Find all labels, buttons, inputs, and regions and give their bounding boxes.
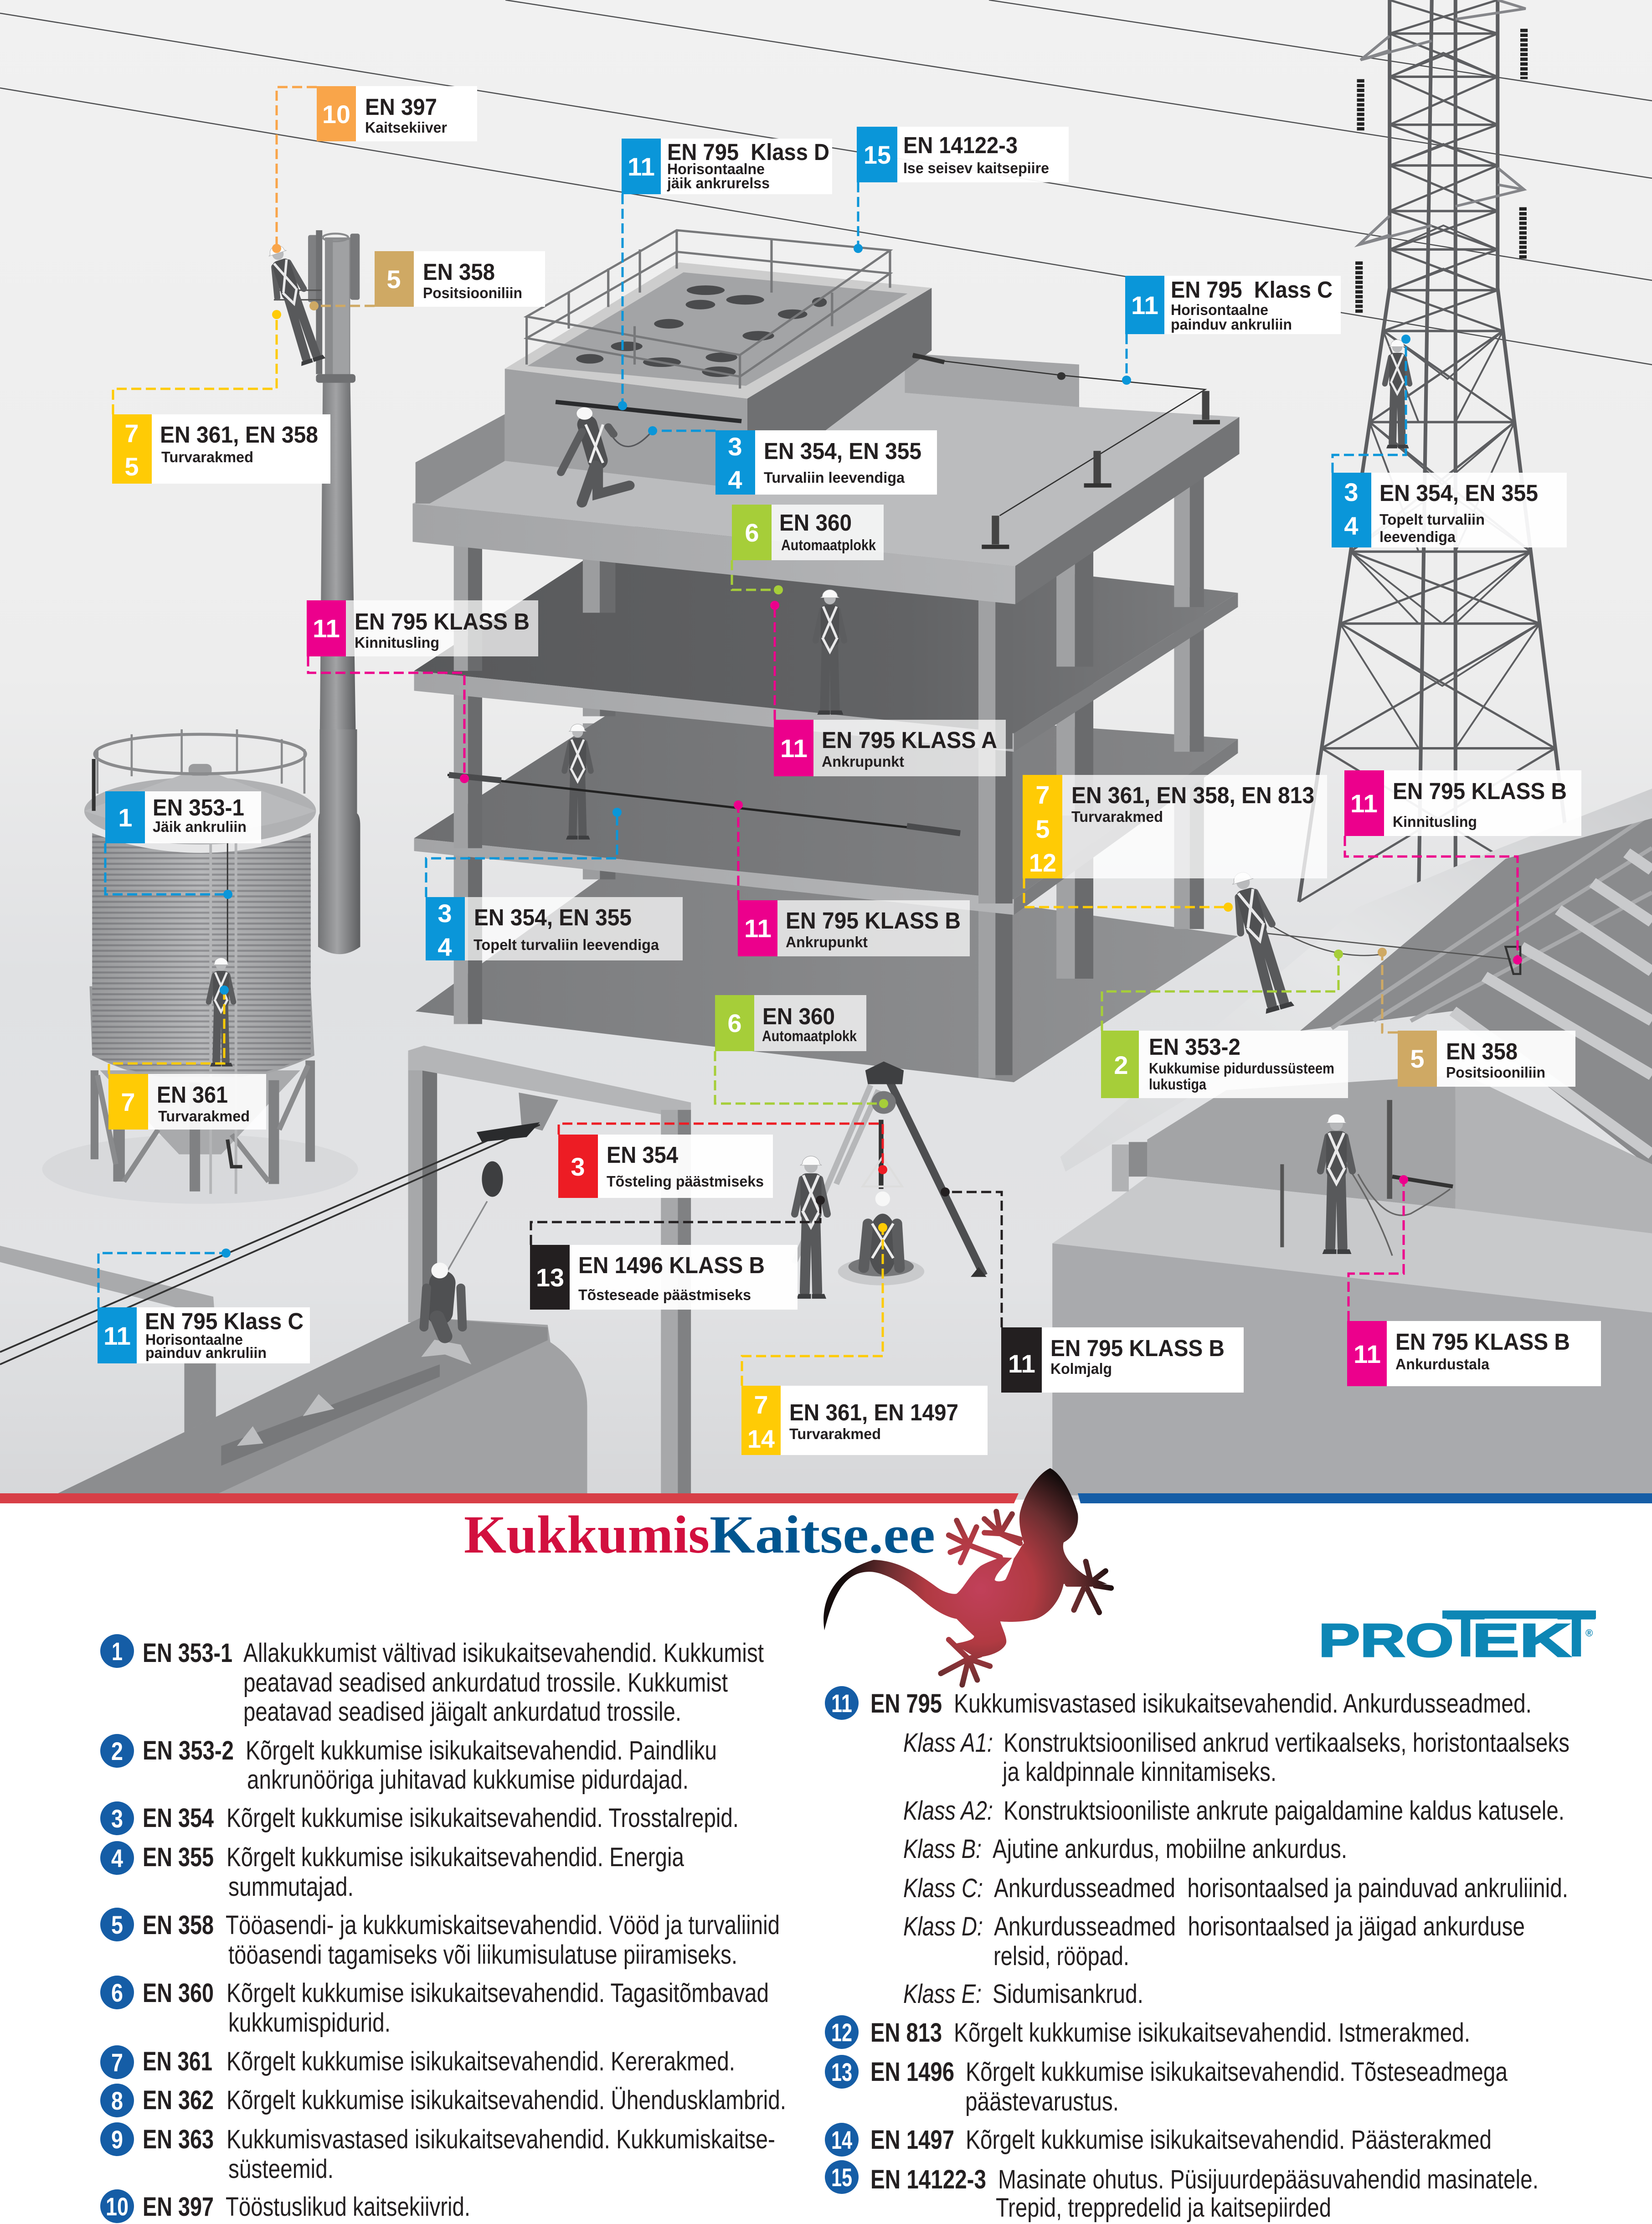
- callout: EN 1496: [530, 1245, 798, 1310]
- legend row 5: 5: [111, 1910, 123, 1939]
- logo: PROTEKT: EK: [1472, 1614, 1571, 1667]
- legend row 3: Kõrgelt kukkumise isikukaitsevahendid. Trosstalrepid.: [226, 1803, 739, 1833]
- legend: Klass C: Klass C:: [903, 1873, 983, 1903]
- legend: Klass D: Klass D:: [903, 1912, 983, 1941]
- callout: EN 361 EN 1497: 14: [747, 1424, 775, 1453]
- legend row 10: Tööstuslikud kaitsekiivrid.: [226, 2192, 470, 2222]
- illustration: climber on pole: [262, 242, 326, 366]
- callout: EN 14122-3: EN 14122-3: [903, 132, 1018, 158]
- legend: Klass D: relsid, rööpad.: [993, 1941, 1129, 1971]
- leader: roof EN 354: [648, 426, 715, 435]
- leader: building EN 354: [426, 808, 622, 897]
- callout: EN 354 EN 355 roof: Turvaliin leevendiga: [764, 469, 905, 486]
- legend row 11: EN 795: [870, 1689, 942, 1718]
- leader: EN 14122-3: [854, 182, 863, 253]
- callout: EN 361 EN 358 EN 813: Turvarakmed: [1071, 808, 1163, 825]
- callout: EN 360 roof: EN 360: [779, 510, 852, 536]
- leader: EN 1496: [531, 1196, 825, 1245]
- legend: Klass E: [903, 1979, 1143, 2009]
- callout: EN 361 EN 358 EN 813: 7: [1035, 780, 1050, 809]
- legend row 14: 14: [831, 2126, 852, 2154]
- callout: EN 795 Klass D: [622, 139, 832, 194]
- illustration: silo: [42, 729, 358, 1204]
- callout: EN 361 EN 358 EN 813: EN 361, EN 358, EN 813: [1071, 782, 1314, 808]
- callout: EN 353-1: EN 353-1: [153, 795, 244, 820]
- legend row 1: 1: [112, 1637, 123, 1666]
- callout: EN 795 Klass C roof: painduv ankruliin: [1171, 316, 1292, 333]
- legend row 9: Kukkumisvastased isikukaitsevahendid. Kukkumiskaitse-: [226, 2125, 775, 2154]
- callout: EN 14122-3: Ise seisev kaitsepiire: [903, 160, 1049, 176]
- legend row 15: EN 14122-3: [870, 2165, 986, 2194]
- legend row 1: peatavad seadised jäigalt ankurdatud trossile.: [243, 1697, 681, 1727]
- legend row 1: [100, 1634, 764, 1727]
- callout: EN 354 EN 355 building: Topelt turvaliin leevendiga: [473, 936, 659, 953]
- legend: Klass D: Ankurdusseadmed horisontaalsed ja jäigad ankurduse: [994, 1912, 1525, 1941]
- legend row 9: 9: [111, 2125, 123, 2154]
- callout: EN 1496: Tõsteseade päästmiseks: [578, 1286, 751, 1303]
- logo: KukkumisKaitse.ee: Kaitse.ee: [710, 1505, 935, 1564]
- callout: EN 354 tõsteling: EN 354: [607, 1142, 679, 1168]
- callout: EN 354 EN 355 roof: EN 354, EN 355: [764, 438, 921, 464]
- legend: Klass A2: Klass A2:: [903, 1796, 993, 1826]
- callout: EN 354 EN 355 building: [426, 897, 683, 961]
- legend row 12: [825, 2015, 1470, 2049]
- leader: tower EN 354: [1333, 335, 1410, 473]
- callout: EN 353-2: EN 353-2: [1149, 1034, 1240, 1060]
- legend row 12: 12: [831, 2018, 852, 2047]
- illustration: rescue tripod and manhole: [794, 1062, 987, 1285]
- legend row 8: Kõrgelt kukkumise isikukaitsevahendid. Ühendusklambrid.: [226, 2085, 786, 2115]
- callout: EN 358 pole: 5: [386, 265, 401, 294]
- callout: EN 795 Klass A: EN 795 KLASS A: [822, 727, 997, 753]
- callout: EN 360 roof: [732, 505, 884, 560]
- legend row 3: EN 354: [143, 1803, 214, 1833]
- callout: EN 354 EN 355 roof: 3: [728, 432, 742, 461]
- legend row 8: EN 362: [143, 2085, 214, 2115]
- callout: EN 361 EN 358 EN 813: [1023, 775, 1327, 878]
- leader: EN 360 tripod: [715, 1051, 888, 1108]
- callout: EN 795 Klass A: 11: [780, 734, 808, 763]
- legend row 11: Kukkumisvastased isikukaitsevahendid. Ankurdusseadmed.: [954, 1689, 1532, 1718]
- leader: ankurdustala: [1348, 1175, 1408, 1321]
- power lines: [0, 0, 1652, 365]
- legend row 13: EN 1496: [870, 2057, 954, 2087]
- callout: EN 354 EN 355 building: EN 354, EN 355: [474, 904, 632, 930]
- callout: EN 795 Klass B kinnitusling right: 11: [1350, 789, 1378, 818]
- leader: EN 353-1: [105, 843, 232, 899]
- callout: EN 795 Klass B ankurdustala: EN 795 KLASS B: [1395, 1329, 1570, 1355]
- callout: EN 361 EN 1497: Turvarakmed: [789, 1425, 881, 1442]
- callout: EN 354 EN 355 tower: 4: [1344, 511, 1359, 540]
- leader: klass A: [770, 601, 779, 720]
- leader: klass C roof: [1122, 334, 1131, 385]
- callout: EN 795 Klass B ankurdustala: 11: [1354, 1340, 1381, 1368]
- legend row 4: 4: [111, 1844, 123, 1873]
- legend row 5: tööasendi tagamiseks või liikumisulatuse piiramiseks.: [228, 1940, 737, 1970]
- legend row 3: 3: [111, 1804, 123, 1833]
- legend: Klass A1: ja kaldpinnale kinnitamiseks.: [1002, 1757, 1276, 1787]
- legend row 13: [825, 2055, 1508, 2116]
- legend row 1: peatavad seadised ankurdatud trossile. Kukkumist: [243, 1668, 728, 1698]
- callout: EN 353-2: Kukkumise pidurdussüsteem: [1149, 1060, 1334, 1077]
- callout: EN 795 Klass B kinnitusling left: EN 795 KLASS B: [355, 609, 530, 635]
- callout: EN 795 Klass B ankurdustala: [1347, 1321, 1601, 1386]
- legend: Klass A1: [903, 1728, 1570, 1787]
- callout: EN 397: [317, 86, 477, 141]
- illustration: horizontal anchor line in building: [448, 775, 960, 833]
- callout: EN 353-1: Jäik ankruliin: [153, 818, 247, 835]
- callout: EN 354 EN 355 tower: EN 354, EN 355: [1379, 480, 1538, 506]
- callout: EN 358 pole: [375, 251, 545, 307]
- callout: EN 354 EN 355 tower: 3: [1344, 478, 1359, 506]
- legend row 13: Kõrgelt kukkumise isikukaitsevahendid. Tõsteseadmega: [966, 2057, 1508, 2087]
- callout: EN 361 EN 358 EN 813: 12: [1029, 848, 1056, 877]
- illustration: worker on tower: [1385, 340, 1410, 449]
- callout: EN 795 Klass B kinnitusling right: EN 795 KLASS B: [1393, 778, 1567, 804]
- callout: EN 353-2: [1101, 1031, 1348, 1098]
- callout: EN 795 Klass B kolmjalg: 11: [1008, 1349, 1035, 1378]
- callout: EN 354 EN 355 tower: Topelt turvaliin: [1379, 511, 1485, 528]
- callout: EN 358 pole: Positsiooniliin: [423, 284, 522, 301]
- callout: EN 353-2: lukustiga: [1149, 1076, 1207, 1093]
- callout: EN 795 Klass C roof: Horisontaalne: [1171, 301, 1268, 318]
- callout: EN 795 Klass C cable: [98, 1307, 310, 1363]
- legend row 6: EN 360: [143, 1978, 214, 2008]
- callout: EN 360 tripod: Automaatplokk: [762, 1027, 857, 1044]
- callout: EN 361 silo: EN 361: [157, 1082, 228, 1108]
- logo: PROTEKT: T: [1446, 1598, 1485, 1670]
- legend row 15: [825, 2160, 1539, 2223]
- callout: EN 795 Klass C cable: Horisontaalne: [145, 1331, 243, 1348]
- callout: EN 358 roof: 5: [1410, 1044, 1425, 1073]
- illustration: kneeling worker on terrace: [561, 407, 629, 503]
- callout: EN 795 Klass B kinnitusling right: [1344, 770, 1581, 836]
- leader: EN 361 EN 358 pole: [113, 310, 281, 414]
- callout: EN 397: EN 397: [365, 94, 437, 120]
- legend row 9: EN 363: [143, 2125, 214, 2154]
- callout: EN 795 Klass B kinnitusling left: Kinnitusling: [355, 634, 439, 651]
- callout: EN 361 silo: Turvarakmed: [158, 1108, 250, 1125]
- callout: EN 360 tripod: [715, 995, 866, 1051]
- callout: EN 14122-3: [857, 127, 1069, 182]
- legend row 10: [100, 2189, 470, 2223]
- legend row 13: päästevarustus.: [965, 2087, 1119, 2116]
- callout: EN 354 EN 355 tower: leevendiga: [1379, 528, 1456, 545]
- leader: EN 361 silo: [109, 986, 229, 1074]
- callout: EN 795 Klass C roof: EN 795 Klass C: [1171, 277, 1333, 303]
- callout: EN 795 Klass C roof: [1125, 276, 1341, 334]
- callout: EN 354 EN 355 roof: 4: [728, 465, 742, 494]
- legend row 5: [100, 1908, 780, 1970]
- illustration: multi-storey building: [412, 263, 1240, 1082]
- callout: EN 795 Klass D: EN 795 Klass D: [667, 139, 829, 165]
- callout: EN 353-1: 1: [118, 803, 133, 832]
- leader: EN 358 pole: [309, 301, 375, 310]
- leader: EN 354 red: [559, 1124, 887, 1174]
- callout: EN 361 EN 358: 7: [124, 419, 139, 448]
- leader: roof EN 360: [732, 560, 783, 594]
- callout: EN 795 Klass C cable: painduv ankruliin: [145, 1344, 267, 1361]
- legend row 14: Kõrgelt kukkumise isikukaitsevahendid. Päästerakmed: [966, 2125, 1492, 2155]
- callout: EN 795 Klass B kolmjalg: EN 795 KLASS B: [1050, 1335, 1225, 1361]
- leader: EN 397: [272, 87, 317, 253]
- logo: PROTEKT: [1318, 1598, 1596, 1670]
- callout: EN 361 EN 358: EN 361, EN 358: [160, 422, 318, 448]
- callout: EN 1496: 13: [536, 1263, 564, 1292]
- illustration: worker on silo ladder: [209, 958, 233, 1067]
- legend: Klass B: Ajutine ankurdus, mobiilne ankurdus.: [993, 1834, 1347, 1864]
- callout: EN 795 Klass A: Ankrupunkt: [822, 753, 904, 770]
- callout: EN 1496: EN 1496 KLASS B: [578, 1252, 765, 1278]
- legend row 13: 13: [831, 2058, 852, 2086]
- legend row 12: Kõrgelt kukkumise isikukaitsevahendid. Istmerakmed.: [954, 2018, 1470, 2048]
- callout: EN 358 roof: EN 358: [1446, 1038, 1518, 1064]
- callout: EN 361 silo: [108, 1074, 266, 1130]
- panel: legend background: [0, 1503, 1652, 2224]
- legend row 6: 6: [111, 1978, 123, 2007]
- legend row 15: Masinate ohutus. Püsijuurdepääsuvahendid masinatele.: [998, 2165, 1539, 2194]
- legend row 4: EN 355: [143, 1842, 214, 1872]
- callout: EN 361 EN 358: 5: [124, 452, 139, 481]
- legend: Klass A1: Klass A1:: [903, 1728, 993, 1758]
- legend row 6: Kõrgelt kukkumise isikukaitsevahendid. Tagasitõmbavad: [226, 1978, 769, 2008]
- legend: Klass E: Sidumisankrud.: [993, 1979, 1143, 2009]
- callout: EN 795 Klass D: jäik ankrurelss: [667, 175, 770, 191]
- legend row 2: [100, 1734, 717, 1795]
- illustration: workers on roof and in attic: [1225, 868, 1353, 1254]
- callout: EN 795 Klass B kinnitusling left: 11: [313, 614, 340, 643]
- leader: klass C cable: [98, 1249, 231, 1307]
- illustration: rooftop guard rail and vents: [527, 230, 890, 447]
- callout: EN 360 roof: 6: [745, 518, 759, 547]
- legend row 15: Trepid, treppredelid ja kaitsepiirded: [996, 2193, 1331, 2223]
- callout: EN 795 Klass B ankrupunkt: [738, 900, 970, 956]
- legend row 7: [100, 2045, 735, 2079]
- callout: EN 795 Klass B kinnitusling right: Kinnitusling: [1393, 813, 1477, 830]
- callout: EN 795 Klass A: [774, 720, 1006, 776]
- legend row 2: 2: [111, 1737, 123, 1765]
- callout: EN 795 Klass B kinnitusling left: [307, 600, 538, 656]
- callout: EN 360 tripod: 6: [727, 1009, 742, 1037]
- callout: EN 795 Klass C cable: 11: [103, 1321, 131, 1350]
- callout: EN 795 Klass B ankrupunkt: EN 795 KLASS B: [786, 908, 961, 934]
- callout: EN 795 Klass C cable: EN 795 Klass C: [145, 1308, 304, 1334]
- legend row 8: 8: [111, 2086, 123, 2115]
- callout: EN 397: 10: [322, 100, 350, 129]
- legend: Klass B: [903, 1834, 1347, 1864]
- callout: EN 795 Klass B ankrupunkt: Ankrupunkt: [786, 934, 868, 950]
- legend row 4: summutajad.: [228, 1872, 354, 1902]
- legend row 15: 15: [831, 2163, 852, 2192]
- leader: klass B ankrupunkt: [734, 800, 743, 900]
- legend row 5: EN 358: [143, 1910, 214, 1940]
- callout: EN 795 Klass B ankrupunkt: 11: [744, 914, 772, 943]
- legend row 1: Allakukkumist vältivad isikukaitsevahendid. Kukkumist: [243, 1638, 764, 1668]
- leader: EN 361 EN 358 EN 813: [1024, 878, 1233, 912]
- legend row 14: EN 1497: [870, 2125, 954, 2155]
- illustration: house with roof rafters: [1052, 789, 1652, 1496]
- legend row 7: Kõrgelt kukkumise isikukaitsevahendid. Kererakmed.: [226, 2047, 735, 2076]
- callout: EN 354 EN 355 roof: [715, 430, 937, 495]
- callout: EN 397: Kaitsekiiver: [365, 119, 447, 136]
- callout: EN 795 Klass C roof: 11: [1131, 291, 1158, 320]
- legend row 12: EN 813: [870, 2018, 942, 2048]
- callout: EN 795 Klass D: 11: [628, 152, 655, 181]
- logo: PROTEKT: ®: [1585, 1627, 1593, 1639]
- callout: EN 361 EN 1497: 7: [754, 1390, 768, 1419]
- legend row 7: 7: [111, 2048, 123, 2077]
- callout: EN 358 roof: [1398, 1031, 1575, 1087]
- callout: EN 795 Klass B kolmjalg: [1001, 1327, 1244, 1393]
- legend row 3: [100, 1801, 739, 1835]
- callout: EN 361 EN 1497: [741, 1386, 988, 1455]
- callout: EN 361 EN 358: Turvarakmed: [161, 449, 253, 465]
- callout: EN 358 roof: Positsiooniliin: [1446, 1064, 1545, 1081]
- legend row 2: ankrunööriga juhitavad kukkumise pidurdajad.: [247, 1765, 689, 1795]
- callout: EN 360 roof: Automaatplokk: [781, 537, 876, 553]
- legend row 9: [100, 2122, 775, 2184]
- panel: illustration background: [0, 0, 1652, 1500]
- illustration: workers inside building: [565, 590, 844, 840]
- callout: EN 354 tõsteling: Tõsteling päästmiseks: [607, 1173, 764, 1190]
- legend row 7: EN 361: [143, 2047, 212, 2076]
- divider bars red and blue: [0, 1493, 1652, 1503]
- leader: klass B kinnitusling left: [308, 656, 469, 783]
- leader: klass D: [618, 194, 627, 410]
- legend row 9: süsteemid.: [228, 2154, 334, 2184]
- legend row 14: [825, 2123, 1492, 2157]
- logo: KukkumisKaitse.ee: Kukkumis: [464, 1505, 710, 1564]
- legend row 1: EN 353-1: [143, 1638, 232, 1668]
- callout: EN 354 EN 355 building: 3: [437, 899, 452, 928]
- callout: EN 361 silo: 7: [121, 1088, 135, 1116]
- callout: EN 361 EN 358: [112, 414, 330, 484]
- legend row 4: [100, 1841, 684, 1902]
- callout: EN 795 Klass B ankurdustala: Ankurdustala: [1395, 1356, 1490, 1373]
- illustration: transmission tower: [1299, 0, 1575, 902]
- legend row 2: EN 353-2: [143, 1736, 234, 1765]
- legend row 10: 10: [106, 2192, 129, 2221]
- callout: EN 354 EN 355 tower: [1332, 473, 1567, 547]
- callout: EN 361 EN 358 EN 813: 5: [1035, 815, 1050, 843]
- callout: EN 795 Klass D: Horisontaalne: [667, 160, 765, 177]
- logo: PROTEKT: PRO: [1318, 1614, 1454, 1667]
- illustration: rescuer beside tripod: [795, 1156, 827, 1299]
- callout: EN 795 Klass B kolmjalg: Kolmjalg: [1050, 1360, 1112, 1377]
- callout: EN 353-1: [105, 791, 261, 843]
- legend row 2: Kõrgelt kukkumise isikukaitsevahendid. Paindliku: [246, 1736, 717, 1765]
- callout: EN 354 EN 355 building: 4: [437, 933, 452, 961]
- callout: EN 354 tõsteling: 3: [571, 1152, 585, 1181]
- legend row 6: kukkumispidurid.: [228, 2008, 391, 2038]
- leader: EN 1497: [742, 1223, 887, 1386]
- callout: EN 360 tripod: EN 360: [762, 1003, 835, 1029]
- logo: KukkumisKaitse.ee: [464, 1505, 935, 1564]
- legend: Klass D: [903, 1912, 1525, 1971]
- illustration: overhead frame and tanker: [0, 1046, 691, 1493]
- logo: PROTEKT: T: [1557, 1598, 1596, 1670]
- legend row 4: Kõrgelt kukkumise isikukaitsevahendid. Energia: [226, 1842, 684, 1872]
- illustration: telecom pole: [274, 228, 360, 954]
- legend row 8: [100, 2084, 786, 2117]
- callout: EN 353-2: 2: [1114, 1051, 1128, 1079]
- callout: EN 14122-3: 15: [864, 140, 891, 169]
- legend row 11: 11: [831, 1689, 852, 1718]
- leader: EN 358 roof: [1378, 948, 1398, 1032]
- illustration: horizontal cable with posts on terrace: [913, 355, 1220, 547]
- legend row 10: EN 397: [143, 2192, 214, 2222]
- legend row 11: [825, 1686, 1532, 1720]
- callout: EN 354 tõsteling: [558, 1135, 773, 1198]
- legend row 6: [100, 1976, 769, 2038]
- leader: kolmjalg: [941, 1187, 1002, 1327]
- legend: Klass E: Klass E:: [903, 1979, 982, 2009]
- legend: Klass B: Klass B:: [903, 1834, 982, 1864]
- callout: EN 358 pole: EN 358: [423, 259, 495, 285]
- legend row 5: Tööasendi- ja kukkumiskaitsevahendid. Vööd ja turvaliinid: [226, 1910, 780, 1940]
- icon: gecko: [823, 1468, 1111, 1685]
- callout: EN 361 EN 1497: EN 361, EN 1497: [789, 1399, 958, 1425]
- leader: klass B right: [1345, 836, 1522, 965]
- leader: EN 353-2: [1102, 949, 1343, 1031]
